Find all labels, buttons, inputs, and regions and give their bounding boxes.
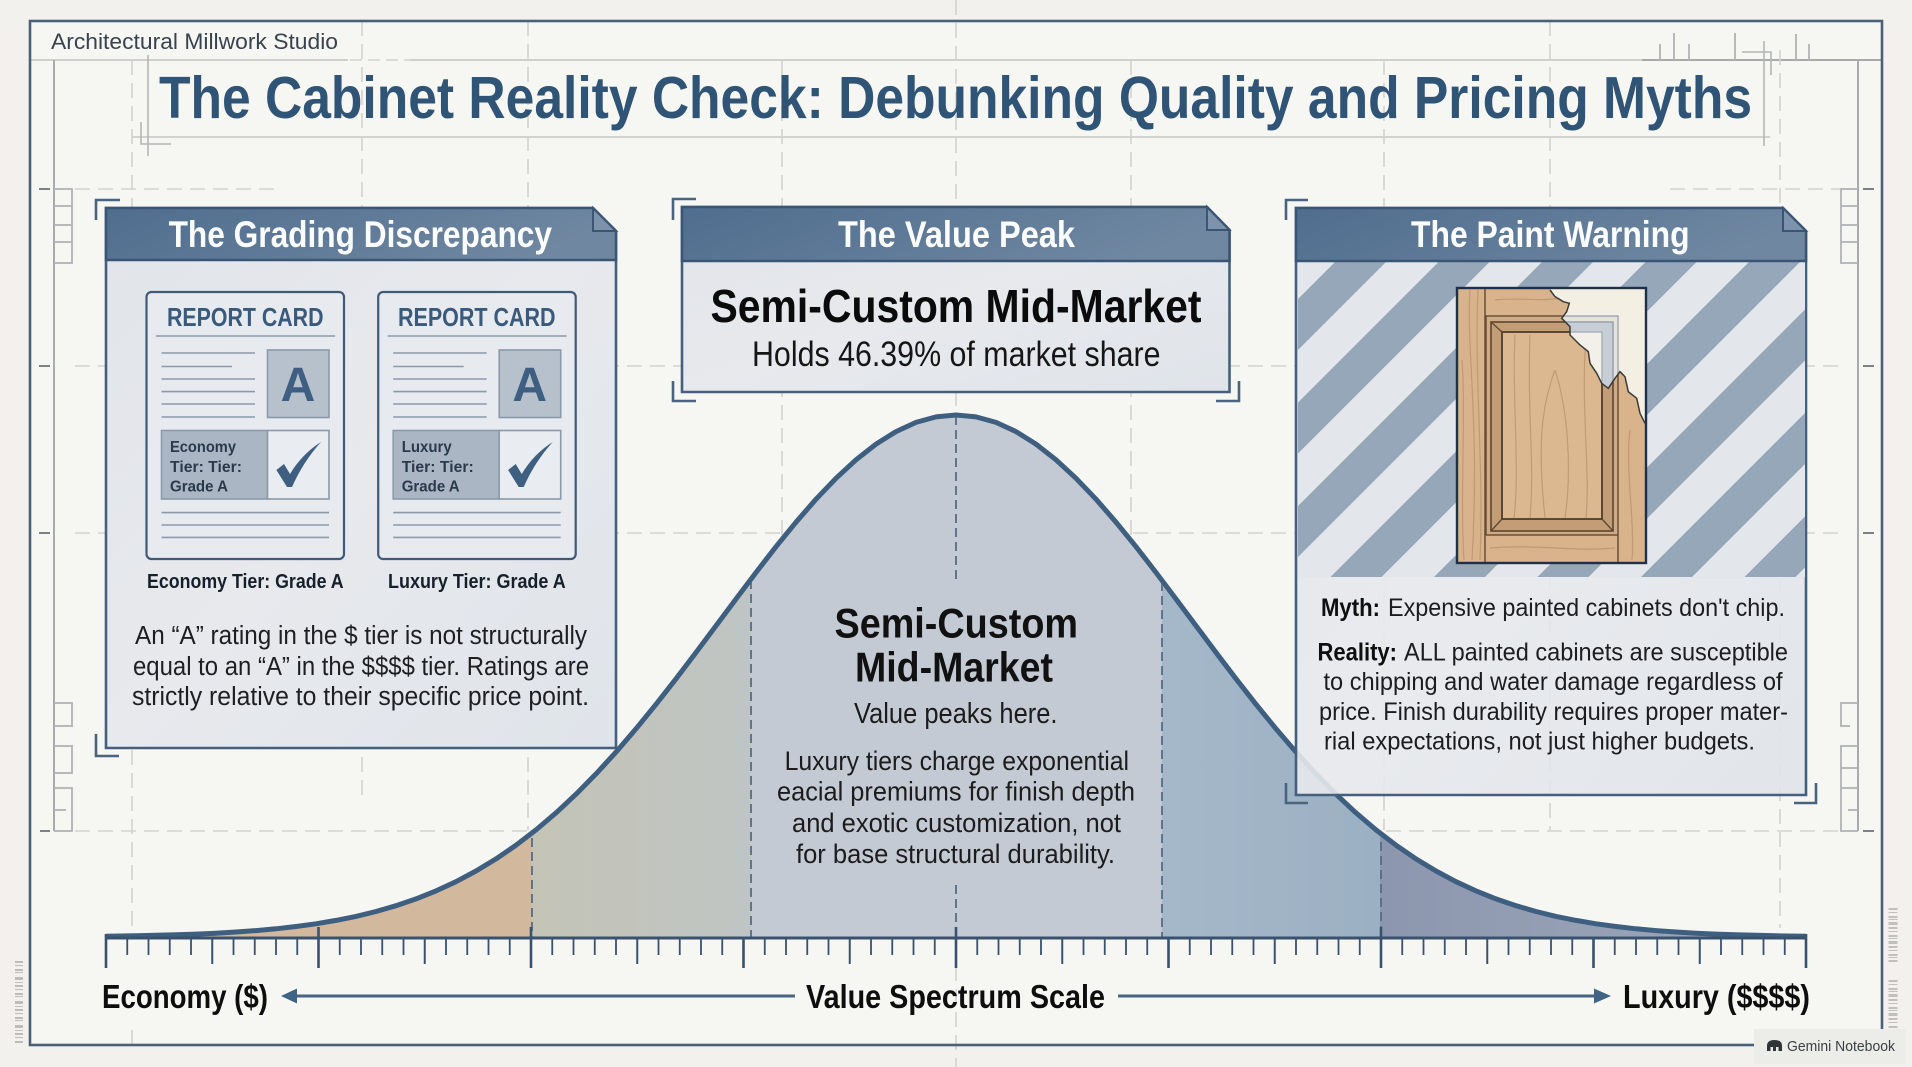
- myth text: Myth:: [1321, 594, 1380, 622]
- panel body: [682, 207, 1230, 392]
- watermark: [1754, 1029, 1906, 1064]
- reality text: [1318, 638, 1788, 756]
- arrow: toward economy: [281, 988, 795, 1004]
- panel: the value peak: [673, 199, 1239, 401]
- bell centre text: [777, 600, 1135, 869]
- reality text: ALL painted cabinets are susceptible: [1404, 638, 1788, 666]
- report card: economy: Tier: Tier:: [170, 459, 242, 476]
- panel body text: An “A” rating in the $ tier is not structurally: [135, 622, 587, 650]
- arrow: toward luxury: [1118, 988, 1611, 1004]
- value spectrum ruler: [106, 927, 1806, 968]
- report card: economy: A: [281, 359, 315, 412]
- reality text: Reality:: [1318, 638, 1397, 666]
- watermark: Gemini Notebook: [1787, 1039, 1896, 1055]
- bell centre text: and exotic customization, not: [792, 808, 1121, 838]
- bell curve: economy segment: [200, 836, 532, 936]
- panel body text: [132, 622, 589, 711]
- corner brackets: [96, 200, 120, 756]
- axis label: scale: Value Spectrum Scale: [806, 978, 1105, 1015]
- panel: the paint warning: [1284, 198, 1818, 804]
- panel body: [106, 208, 616, 748]
- report card: luxury: Tier: Tier:: [402, 459, 474, 476]
- bell centre text: Mid-Market: [855, 644, 1053, 690]
- report card: economy: REPORT CARD: [167, 302, 324, 332]
- panel body text: strictly relative to their specific price point.: [132, 683, 589, 711]
- warning stripes: [1298, 262, 1805, 577]
- icon: notebook logo: [1767, 1040, 1782, 1051]
- panel: the grading discrepancy: [96, 200, 616, 756]
- panel header: [106, 208, 616, 260]
- bell centre text: eacial premiums for finish depth: [777, 777, 1135, 807]
- header fold: [1207, 207, 1230, 230]
- headline: Semi-Custom Mid-Market: [710, 280, 1202, 332]
- reality text: rial expectations, not just higher budgets.: [1324, 728, 1755, 756]
- bell centre text: Value peaks here.: [854, 698, 1058, 730]
- header fold: [1783, 208, 1806, 231]
- report card: luxury: A: [512, 359, 547, 412]
- bell curve: lower-mid segment: [532, 584, 751, 936]
- bell centre text: Semi-Custom: [834, 600, 1078, 646]
- icon: chipped cabinet door: [1457, 288, 1646, 563]
- bell curve outline: [106, 415, 1806, 936]
- report card: luxury: Luxury: [402, 439, 452, 456]
- axis label: luxury: Luxury ($$$$): [1623, 978, 1810, 1015]
- bell curve: luxury segment: [1380, 836, 1712, 936]
- myth text: Expensive painted cabinets don't chip.: [1388, 594, 1785, 622]
- panel header: [1296, 208, 1806, 261]
- header fold: [593, 208, 616, 231]
- panel heading: The Paint Warning: [1411, 214, 1690, 255]
- bell curve chart: [106, 400, 1806, 940]
- studio label: Architectural Millwork Studio: [51, 29, 338, 54]
- corner brackets: [1286, 200, 1816, 803]
- report card: economy: Economy: [170, 439, 236, 456]
- segment dividers: [532, 416, 1381, 937]
- panel body text: equal to an “A” in the $$$$ tier. Ratings are: [133, 653, 589, 681]
- panel heading: The Grading Discrepancy: [169, 214, 552, 255]
- panel heading: The Value Peak: [838, 214, 1075, 255]
- bell centre text: for base structural durability.: [796, 839, 1115, 869]
- report card: luxury: REPORT CARD: [398, 302, 556, 332]
- market share stat: Holds 46.39% of market share: [752, 335, 1160, 374]
- caption: economy: Economy Tier: Grade A: [147, 570, 344, 593]
- bell centre text: Luxury tiers charge exponential: [785, 746, 1129, 776]
- reality text: to chipping and water damage regardless of: [1324, 668, 1783, 696]
- corner brackets: [673, 199, 1239, 401]
- panel header: [682, 207, 1230, 261]
- reality text: price. Finish durability requires proper mater-: [1319, 698, 1788, 726]
- bell curve: semi-custom segment: [751, 400, 1162, 940]
- report card: economy: Grade A: [170, 478, 228, 496]
- axis label: economy: Economy ($): [102, 978, 268, 1015]
- report card: luxury: Grade A: [402, 478, 460, 496]
- report card: luxury: [378, 292, 576, 559]
- bell curve: upper-mid segment: [1162, 586, 1380, 936]
- report card: economy: [146, 292, 344, 559]
- caption: luxury: Luxury Tier: Grade A: [388, 570, 566, 593]
- panel body: [1296, 208, 1806, 795]
